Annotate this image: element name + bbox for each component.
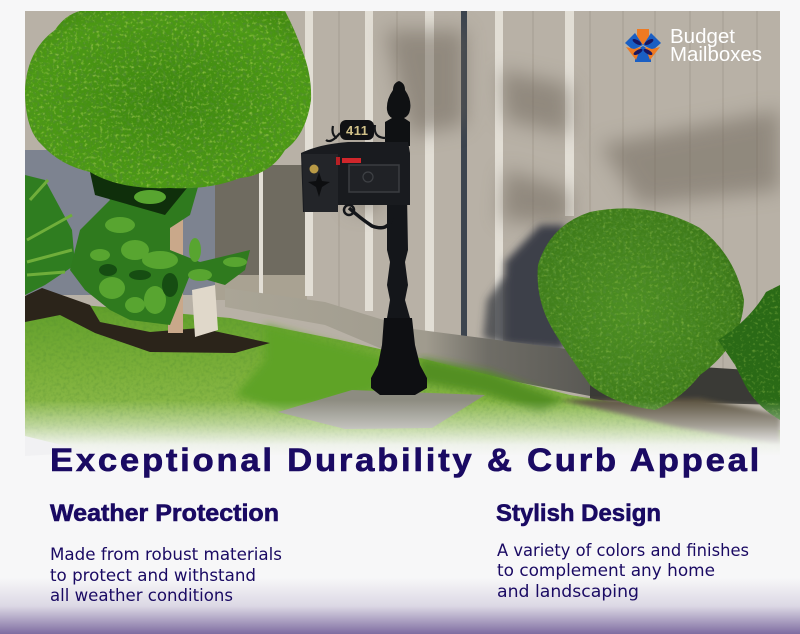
fence bottom rail: [225, 288, 590, 396]
body: weather protection: to protect and withstand: [50, 566, 256, 586]
heading: stylish design: Stylish Design: [496, 500, 661, 527]
photo bottom fade: [25, 400, 780, 456]
logo wordmark: Mailboxes: [670, 44, 762, 66]
far right bush: [718, 285, 780, 420]
far right dark rail: [590, 368, 760, 404]
red flag: [342, 158, 361, 163]
lawn: [25, 300, 780, 460]
text block: weather protection: [50, 500, 282, 606]
title: Exceptional Durability & Curb Appeal: [50, 442, 762, 478]
fence shadows: [350, 30, 780, 225]
logo wordmark: [670, 26, 762, 66]
stepping stone: [278, 390, 485, 429]
logo: Budget Mailboxes: [625, 26, 762, 66]
box: [301, 142, 410, 212]
body: weather protection: [50, 545, 282, 606]
body: stylish design: and landscaping: [497, 582, 639, 602]
left spiky plant: [25, 175, 75, 295]
scrollwork: [326, 125, 386, 141]
pale path at left edge: [25, 436, 59, 446]
body: stylish design: to complement any home: [497, 561, 715, 581]
logo wordmark: Budget: [670, 26, 735, 48]
photo: mailbox in front yard: [25, 11, 780, 460]
body: stylish design: A variety of colors and finishes: [497, 541, 749, 561]
fence: [25, 11, 780, 431]
left leafy plants: [70, 172, 250, 325]
finial: [385, 81, 410, 146]
post base: [371, 318, 427, 395]
icon: logo mark: [625, 29, 661, 62]
body: stylish design: [497, 541, 749, 602]
body: weather protection: all weather conditions: [50, 586, 233, 606]
number plaque: [340, 120, 374, 140]
mulch beds: [25, 288, 270, 353]
right round bush: [538, 208, 744, 410]
number plaque: 411: [346, 123, 368, 138]
bottom purple gradient band: [0, 578, 800, 634]
bush shadow on fence: [483, 225, 565, 350]
bracket: [349, 208, 392, 228]
text block: stylish design: [496, 500, 749, 602]
left tree trunks: [168, 218, 218, 337]
topiary tree: [25, 11, 311, 188]
post: [387, 205, 410, 318]
heading: weather protection: Weather Protection: [50, 500, 279, 527]
body: weather protection: Made from robust materials: [50, 545, 282, 565]
mailbox on post: [301, 81, 427, 395]
